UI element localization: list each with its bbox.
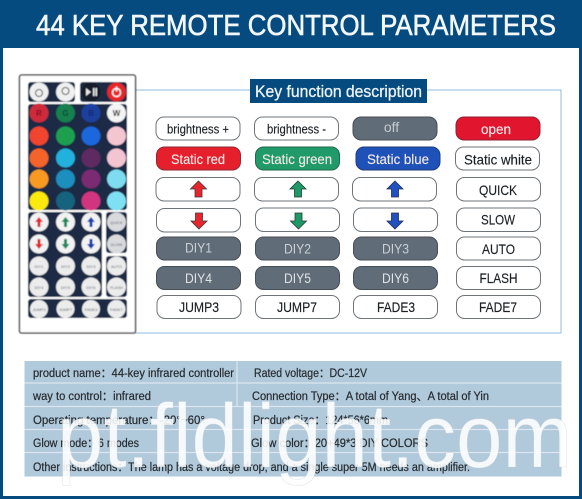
remote: mode keys: DIY6 <box>87 285 96 290</box>
key row 5: DIY 1-3, AUTO: DIY2 <box>284 242 311 256</box>
key row 2: Static blue <box>367 151 429 167</box>
remote: colour keys: R <box>36 109 42 118</box>
row: temperature and size <box>33 415 388 427</box>
remote: mode keys: QUICK <box>110 220 123 225</box>
remote: colour keys <box>30 104 126 210</box>
panel: remote control <box>20 75 136 333</box>
key row 6: DIY 4-6, FLASH <box>156 266 540 290</box>
key row 2: Static red <box>171 151 225 167</box>
key row 6: DIY 4-6, FLASH: DIY4 <box>185 271 212 286</box>
key row 7: jump and fade <box>157 296 540 318</box>
key row 5: DIY 1-3, AUTO: DIY3 <box>382 242 409 256</box>
row: glow mode and colour: Glow mode：6 modes <box>33 438 139 450</box>
key row 4: down arrows <box>156 208 540 232</box>
remote: top keys <box>30 82 126 102</box>
key row 1: off <box>384 119 399 135</box>
key row 6: DIY 4-6, FLASH: FLASH <box>480 270 518 286</box>
remote: mode keys: SLOW <box>111 242 123 247</box>
remote: colour keys: G <box>62 109 69 118</box>
key row 2: Static green <box>262 151 332 167</box>
key row 1: brightness - <box>267 122 326 136</box>
remote: mode keys: DIY5 <box>61 285 71 290</box>
remote: arrow keys <box>30 212 100 254</box>
remote: mode keys <box>30 212 126 318</box>
key row 1 <box>156 117 540 140</box>
key row 1: open <box>481 121 511 137</box>
remote: mode keys: DIY1 <box>35 264 44 269</box>
row: control and connection: Connection Type：A total of Yang、A total of Yin <box>252 391 489 403</box>
remote: mode keys: FADE3 <box>85 307 98 312</box>
row: control and connection <box>32 391 489 403</box>
key row 7: jump and fade: FADE3 <box>377 299 415 315</box>
row: product name and voltage: Rated voltage：DC-12V <box>254 368 367 380</box>
row: control and connection: way to control：infrared <box>32 391 151 403</box>
row: temperature and size: Product Size：124*56*6mm <box>253 415 388 427</box>
key row 7: jump and fade: JUMP7 <box>277 299 317 315</box>
row: glow mode and colour: Glow color：20+49*3 DIY COLORS <box>251 438 428 450</box>
key row 5: DIY 1-3, AUTO: DIY1 <box>185 240 212 256</box>
key row 6: DIY 4-6, FLASH: DIY5 <box>284 271 311 286</box>
remote: mode keys: JUMP7 <box>59 307 73 312</box>
key row 7: jump and fade: FADE7 <box>479 299 517 315</box>
remote: colour keys: W <box>113 109 121 118</box>
heading: key function description: Key function description <box>255 83 422 101</box>
key row 6: DIY 4-6, FLASH: DIY6 <box>382 271 409 286</box>
key row 1: brightness + <box>167 122 229 136</box>
remote: mode keys: FLASH <box>110 285 123 290</box>
key row 2 <box>156 147 540 170</box>
key row 7: jump and fade: JUMP3 <box>179 299 219 315</box>
key row 2: Static white <box>464 152 532 168</box>
row: glow mode and colour <box>33 438 428 450</box>
row: other instructions: Other instructions：The lamp has a voltage drop, and a single super 5M needs an amplifier. <box>33 462 470 474</box>
remote: colour keys: B <box>88 109 94 118</box>
remote: mode keys: DIY2 <box>61 264 71 269</box>
title banner <box>0 0 582 48</box>
remote: mode keys: DIY4 <box>35 285 44 290</box>
key row 3: up arrows: QUICK <box>479 182 518 198</box>
remote: mode keys: FADE7 <box>110 307 124 312</box>
panel: parameters table <box>24 361 562 476</box>
key row 3: up arrows <box>156 178 540 201</box>
remote: mode keys: JUMP3 <box>32 307 46 312</box>
row: product name and voltage <box>33 368 367 380</box>
key row 5: DIY 1-3, AUTO: AUTO <box>482 241 515 257</box>
key row 5: DIY 1-3, AUTO <box>156 237 540 260</box>
key row 4: down arrows: SLOW <box>481 212 516 228</box>
remote: mode keys: AUTO <box>111 264 122 269</box>
remote: mode keys: DIY3 <box>87 264 96 269</box>
key function frame lines <box>135 90 561 333</box>
row: temperature and size: Operating temperature：-20°~60° <box>33 415 205 427</box>
row: product name and voltage: product name：44-key infrared controller <box>33 368 234 380</box>
